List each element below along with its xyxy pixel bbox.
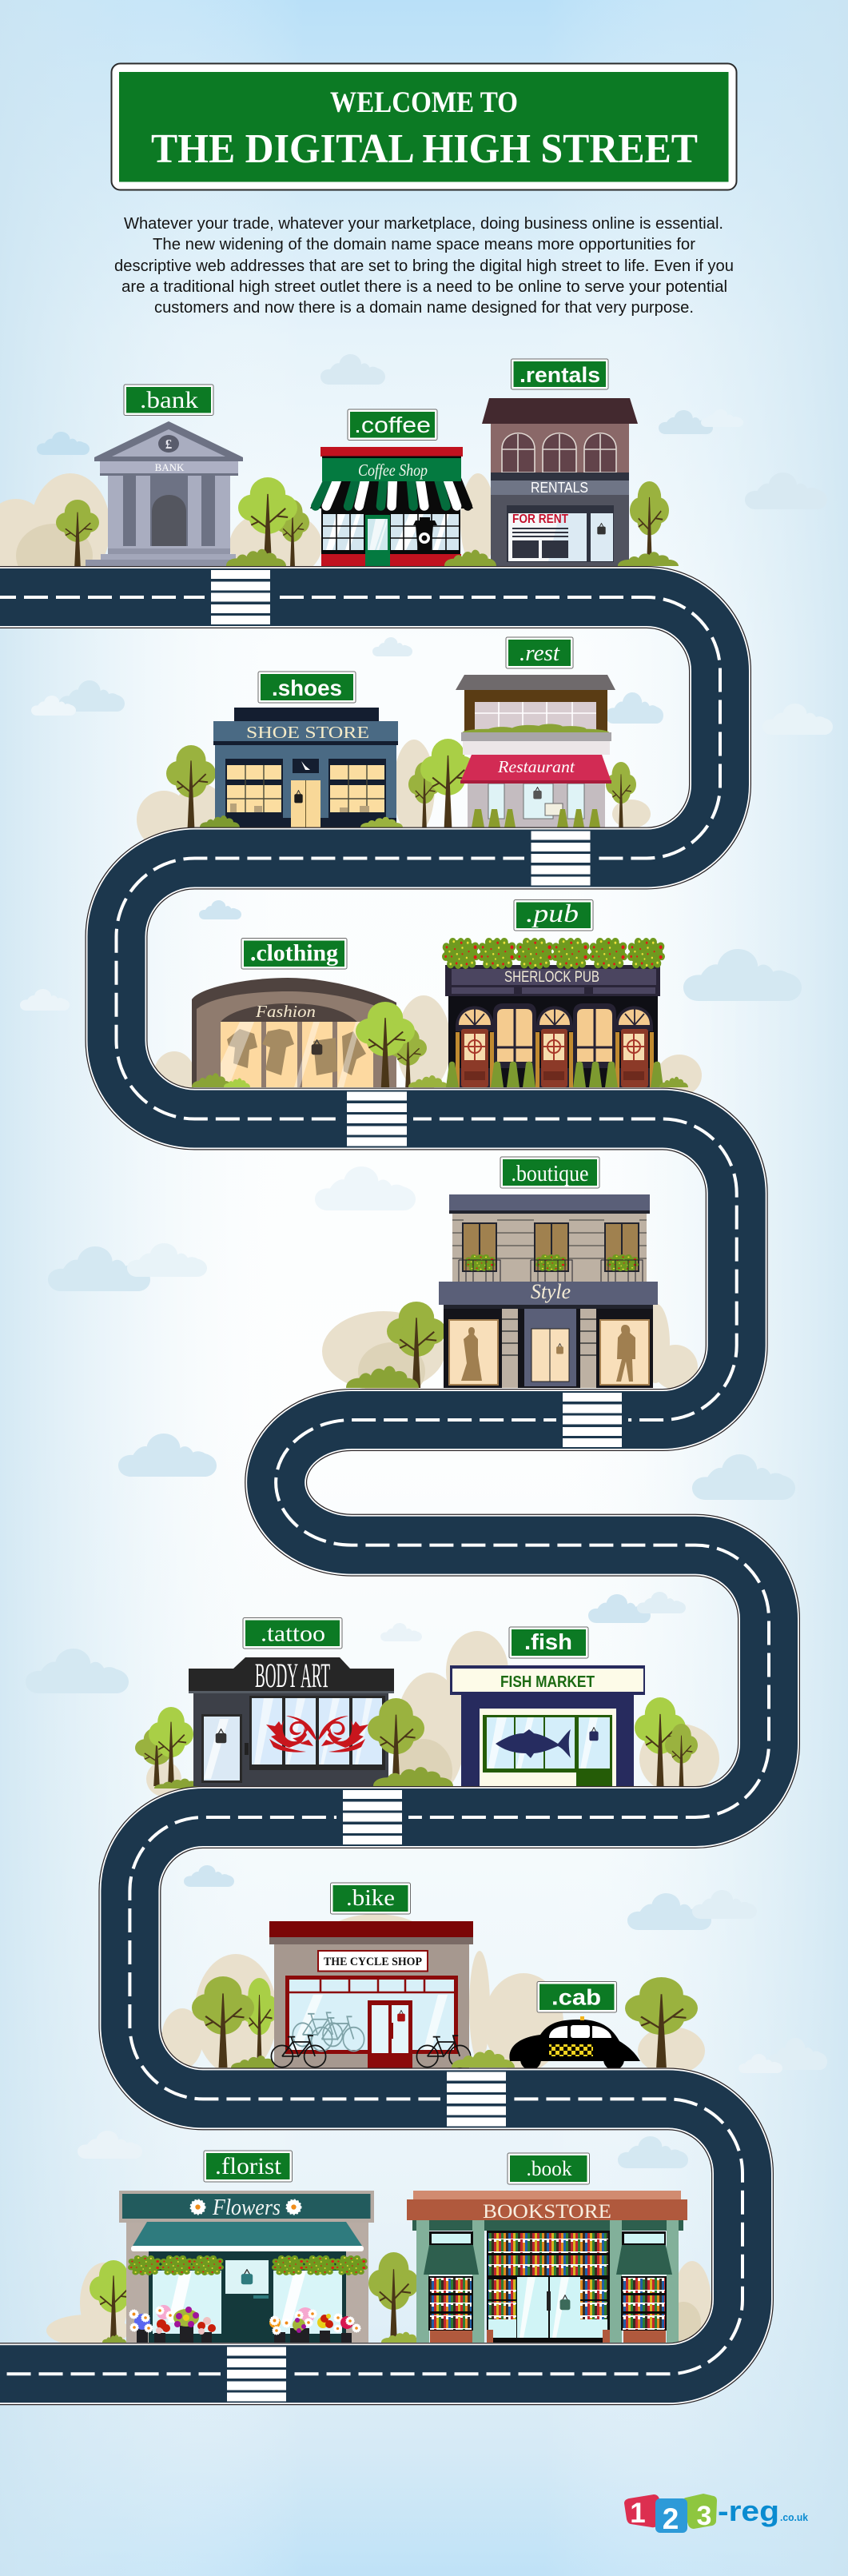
intro paragraph: descriptive web addresses that are set to bring the digital high street to life. Even if you bbox=[114, 257, 734, 275]
trees and bushes bbox=[56, 477, 698, 2343]
sign: .bike: .bike bbox=[346, 1886, 395, 1911]
zebra crossings bbox=[205, 570, 628, 2402]
sign: .florist: .florist bbox=[215, 2153, 282, 2179]
title sign: WELCOME TO bbox=[330, 86, 518, 119]
winding road bbox=[0, 597, 769, 2374]
sign: .pub: .pub bbox=[526, 899, 579, 927]
sign: .coffee: .coffee bbox=[354, 413, 431, 437]
building: bank bbox=[86, 421, 243, 566]
logo: 123-reg.co.uk: -reg bbox=[718, 2494, 779, 2527]
sign: .fish bbox=[509, 1627, 588, 1658]
sign: .fish: .fish bbox=[524, 1629, 572, 1654]
building: fish market: FISH MARKET bbox=[500, 1673, 595, 1691]
building: shoe store: SHOE STORE bbox=[246, 723, 369, 742]
building: restaurant bbox=[456, 675, 615, 827]
bushes near first street bbox=[226, 549, 679, 566]
intro paragraph: are a traditional high street outlet there is a need to be online to serve your potential bbox=[121, 278, 727, 296]
sign: .boutique: .boutique bbox=[512, 1162, 588, 1186]
logo: 123-reg.co.uk: 1 bbox=[630, 2498, 646, 2529]
building: rentals bbox=[482, 398, 638, 566]
sign: .rentals: .rentals bbox=[520, 363, 600, 387]
sign: .rest: .rest bbox=[520, 641, 560, 666]
building: cycle shop: THE CYCLE SHOP bbox=[324, 1956, 422, 1968]
building: fashion bbox=[192, 978, 448, 1087]
building: body art tattoo bbox=[189, 1657, 424, 1786]
intro paragraph: customers and now there is a domain name designed for that very purpose. bbox=[154, 299, 694, 317]
title sign: THE DIGITAL HIGH STREET bbox=[151, 126, 698, 172]
building: flower shop: Flowers bbox=[212, 2195, 281, 2220]
sign: .pub bbox=[514, 899, 593, 931]
sign: .rentals bbox=[512, 359, 608, 389]
building: restaurant: Restaurant bbox=[497, 757, 575, 776]
building: boutique: Style bbox=[531, 1280, 571, 1303]
building: fashion: Fashion bbox=[255, 1002, 316, 1021]
sign: .book bbox=[508, 2153, 590, 2184]
sign: .bank: .bank bbox=[140, 387, 198, 413]
building: bank: £ bbox=[165, 437, 172, 452]
building: boutique bbox=[439, 1194, 658, 1388]
building: sherlock pub: SHERLOCK PUB bbox=[504, 969, 599, 986]
intro paragraph: The new widening of the domain name space means more opportunities for bbox=[153, 236, 695, 253]
black cab bbox=[509, 2016, 640, 2070]
sign: .book: .book bbox=[526, 2157, 572, 2180]
title sign bbox=[112, 64, 737, 190]
sign: .cab bbox=[537, 1981, 617, 2012]
sign: .bike bbox=[331, 1883, 411, 1914]
building: sherlock pub bbox=[442, 938, 688, 1087]
logo: 123-reg.co.uk bbox=[624, 2494, 809, 2535]
building: bank: BANK bbox=[155, 461, 185, 473]
building: cycle shop bbox=[269, 1921, 515, 2068]
logo: 123-reg.co.uk: .co.uk bbox=[780, 2511, 809, 2523]
building: fish market bbox=[373, 1665, 645, 1786]
sign: .tattoo: .tattoo bbox=[261, 1621, 325, 1647]
building: coffee shop bbox=[310, 447, 473, 566]
sign: .tattoo bbox=[243, 1618, 342, 1649]
sign: .clothing: .clothing bbox=[250, 940, 338, 966]
building: body art tattoo: BODY ART bbox=[255, 1657, 330, 1695]
intro paragraph bbox=[114, 215, 734, 317]
building: shoe store bbox=[200, 708, 403, 827]
sign: .rest bbox=[506, 637, 573, 668]
sign: .shoes: .shoes bbox=[272, 676, 342, 700]
logo: 123-reg.co.uk: 2 bbox=[663, 2502, 679, 2535]
building: coffee shop: Coffee Shop bbox=[358, 461, 428, 480]
sign: .cab: .cab bbox=[551, 1984, 601, 2010]
clouds bbox=[20, 354, 833, 2168]
sign: .boutique bbox=[500, 1157, 599, 1188]
building: rentals: RENTALS bbox=[531, 480, 588, 496]
sign: .bank bbox=[124, 385, 213, 416]
building: bookstore: BOOKSTORE bbox=[483, 2201, 611, 2223]
hills behind buildings bbox=[0, 473, 719, 2347]
sign: .shoes bbox=[258, 672, 356, 703]
sign: .florist bbox=[204, 2151, 293, 2182]
building: bookstore bbox=[407, 2191, 687, 2343]
building: flower shop bbox=[119, 2191, 423, 2343]
intro paragraph: Whatever your trade, whatever your marketplace, doing business online is essential. bbox=[124, 215, 723, 233]
logo: 123-reg.co.uk: 3 bbox=[697, 2501, 711, 2531]
sign: .coffee bbox=[348, 409, 437, 440]
building: rentals: FOR RENT bbox=[512, 512, 568, 526]
